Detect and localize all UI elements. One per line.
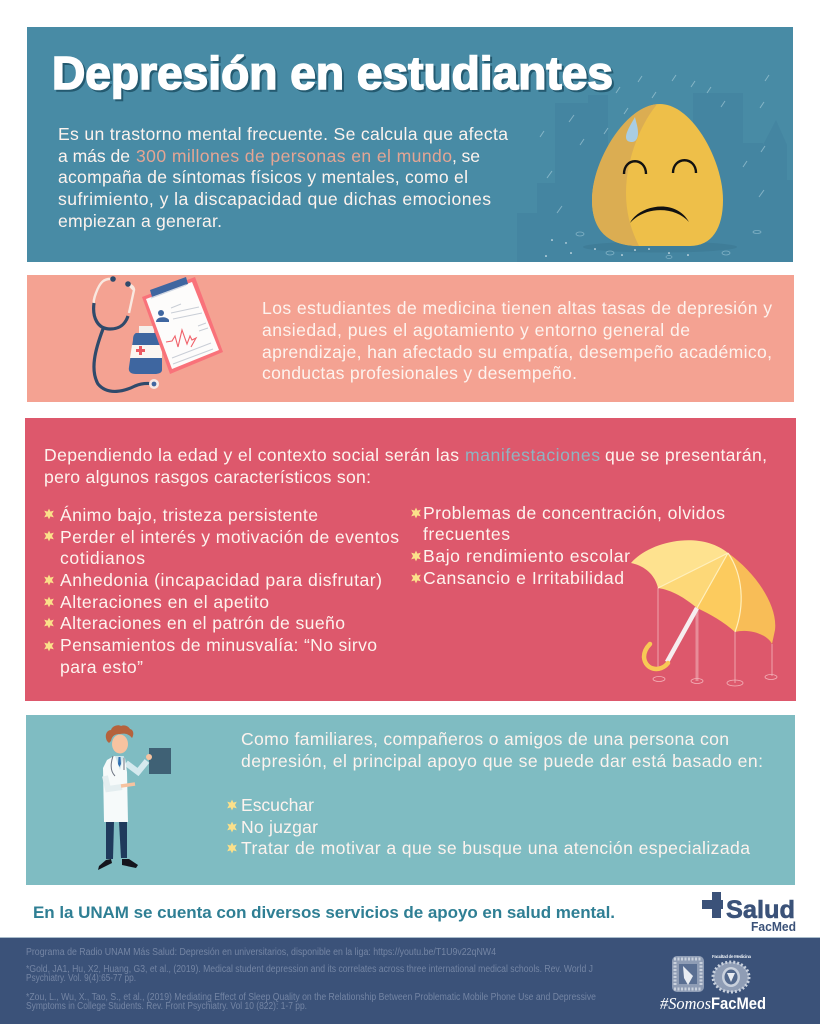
symptoms list left: para esto” (60, 657, 143, 677)
support list: Tratar de motivar a que se busque una atención especializada (241, 838, 750, 858)
symptoms list left: Pensamientos de minusvalía: “No sirvo (60, 635, 377, 655)
panel: support (26, 715, 795, 885)
medical students text: ansiedad, pues el agotamiento y entorno general de (262, 320, 690, 340)
logo: Salud FacMed: Salud (726, 896, 795, 924)
medical students text (262, 298, 772, 383)
icon: stethoscope, clipboard and medicine (94, 276, 223, 391)
icon: sad face (545, 104, 761, 258)
intro text: sufrimiento, y la discapacidad que dichas emociones (58, 189, 491, 209)
intro text: , se (452, 146, 480, 166)
logo: Facultad de Medicina emblem: Facultad de Medicina (712, 954, 751, 959)
UNAM services statement: En la UNAM se cuenta con diversos servicios de apoyo en salud mental. (33, 903, 615, 922)
support list (241, 795, 750, 858)
logo: Salud FacMed: FacMed (751, 919, 796, 934)
support intro (241, 729, 763, 771)
panel: header (27, 27, 793, 262)
panel: medical students (27, 275, 794, 402)
title: Depresión en estudiantes (52, 47, 613, 99)
references: Symptoms in College Students. Rev. Front Psychiatry. Vol 10 (822): 1-7 pp. (26, 1001, 307, 1012)
symptoms list left: Alteraciones en el patrón de sueño (60, 613, 345, 633)
panel: manifestations (25, 418, 796, 701)
bullet markers (44, 508, 421, 651)
manifestations intro: pero algunos rasgos característicos son: (44, 467, 371, 487)
medical students text: aprendizaje, han afectado su empatía, desempeño académico, (262, 342, 772, 362)
manifestations intro: que se presentarán, (605, 445, 767, 465)
references: Psychiatry. Vol. 9(4):65-77 pp. (26, 973, 136, 984)
rain (540, 75, 769, 213)
support intro: depresión, el principal apoyo que se puede dar está basado en: (241, 751, 763, 771)
references: Programa de Radio UNAM Más Salud: Depresión en universitarios, disponible en la liga: https://youtu.be/T1U9v22qNW4 (26, 947, 496, 958)
symptoms list left: Ánimo bajo, tristeza persistente (60, 505, 318, 525)
medical students text: Los estudiantes de medicina tienen altas tasas de depresión y (262, 298, 772, 318)
symptoms list left: cotidianos (60, 548, 145, 568)
symptoms list right: Cansancio e Irritabilidad (423, 568, 624, 588)
symptoms list left: Alteraciones en el apetito (60, 592, 269, 612)
symptoms list right: Problemas de concentración, olvidos (423, 503, 725, 523)
logo: Salud FacMed (702, 892, 796, 934)
references: *Gold, JA1, Hu, X2, Huang, G3, et al., (2019). Medical student depression and its correlates across three international medical schools. Rev. World J (26, 964, 593, 975)
medical students text: conductas profesionales y desempeño. (262, 363, 577, 383)
intro text: acompaña de síntomas físicos y mentales, como el (58, 167, 468, 187)
logo: Facultad de Medicina emblem (712, 954, 751, 992)
manifestations intro: manifestaciones (465, 445, 600, 465)
hashtag: #Somos (660, 994, 711, 1013)
symptoms list right: frecuentes (423, 524, 510, 544)
support list: Escuchar (241, 795, 314, 815)
hashtag: FacMed (711, 994, 766, 1013)
intro text: 300 millones de personas en el mundo (136, 146, 452, 166)
support list: No juzgar (241, 817, 318, 837)
symptoms list left: Perder el interés y motivación de eventos (60, 527, 399, 547)
manifestations intro: Dependiendo la edad y el contexto social serán las (44, 445, 459, 465)
references (26, 947, 596, 1012)
logo: UNAM emblem (672, 956, 704, 992)
symptoms list right (423, 503, 725, 588)
panel: footer (0, 937, 820, 1024)
intro text: Es un trastorno mental frecuente. Se calcula que afecta (58, 124, 508, 144)
support markers (227, 800, 237, 853)
intro text: empiezan a generar. (58, 211, 222, 231)
icon: doctor holding chart (98, 725, 171, 870)
symptoms list left: Anhedonia (incapacidad para disfrutar) (60, 570, 382, 590)
symptoms list right: Bajo rendimiento escolar (423, 546, 630, 566)
intro text (58, 124, 508, 231)
support intro: Como familiares, compañeros o amigos de una persona con (241, 729, 729, 749)
city skyline background (517, 93, 793, 262)
manifestations intro (44, 445, 767, 487)
icon: umbrella (631, 540, 777, 686)
references: *Zou, L., Wu, X., Tao, S., et al., (2019) Mediating Effect of Sleep Quality on the Relationship Between Problematic Mobile Phone Use and Depressive (26, 992, 596, 1003)
hashtag (660, 994, 766, 1013)
symptoms list left (60, 505, 399, 677)
intro text: a más de (58, 146, 130, 166)
